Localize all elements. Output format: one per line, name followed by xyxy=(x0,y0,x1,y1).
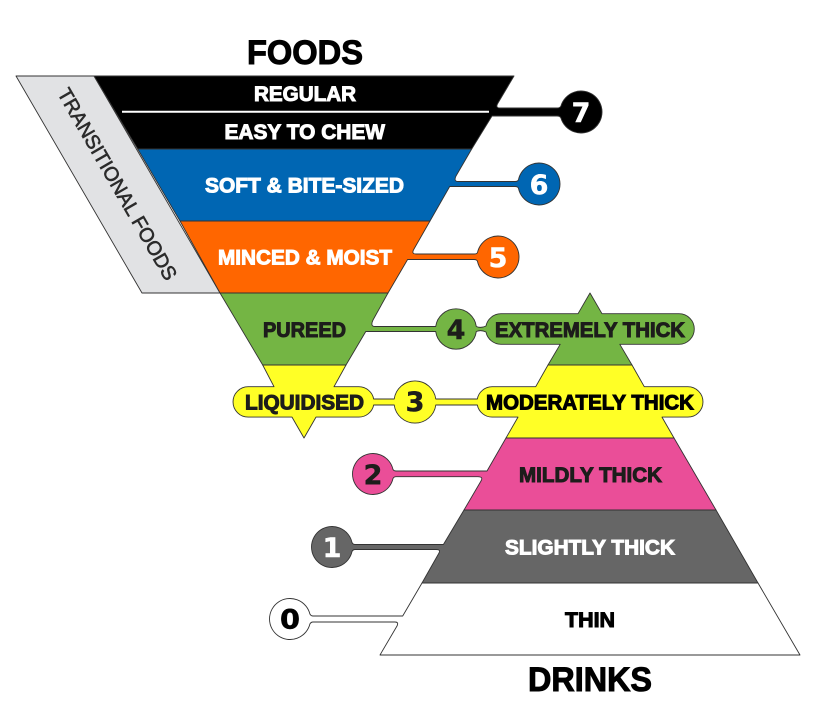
label: pureed: PUREED xyxy=(263,319,346,342)
level 0: thin xyxy=(270,583,800,655)
title: drinks: DRINKS xyxy=(528,661,652,699)
number 7: 7 xyxy=(572,98,590,129)
level 3: liquidised and moderately thick xyxy=(233,365,703,438)
label: easy to chew: EASY TO CHEW xyxy=(224,121,385,144)
number 3: 3 xyxy=(406,387,424,418)
level 5: minced and moist xyxy=(180,221,519,293)
title: foods: FOODS xyxy=(247,34,363,72)
level 2: mildly thick xyxy=(352,438,716,510)
label: slightly thick: SLIGHTLY THICK xyxy=(505,536,675,560)
level 1: slightly thick xyxy=(311,510,758,583)
label: liquidised: LIQUIDISED xyxy=(245,392,364,414)
label: extremely thick: EXTREMELY THICK xyxy=(495,319,685,342)
number 4: 4 xyxy=(447,315,465,346)
number 1: 1 xyxy=(323,533,341,564)
number 2: 2 xyxy=(364,460,382,491)
level 7: regular and easy to chew xyxy=(94,76,602,149)
level 4: pureed and extremely thick xyxy=(220,293,694,365)
label: soft and bite-sized: SOFT & BITE-SIZED xyxy=(205,174,404,198)
number 0: 0 xyxy=(280,604,300,636)
label: minced and moist: MINCED & MOIST xyxy=(218,246,392,270)
label: regular: REGULAR xyxy=(254,83,356,106)
number 6: 6 xyxy=(530,170,548,201)
number 5: 5 xyxy=(489,243,507,274)
level 6: soft and bite-sized xyxy=(138,149,560,221)
label: mildly thick: MILDLY THICK xyxy=(519,464,662,487)
label: moderately thick: MODERATELY THICK xyxy=(486,392,694,414)
panel: transitional foods band xyxy=(16,76,220,293)
label: thin: THIN xyxy=(565,609,615,632)
label: transitional foods: TRANSITIONAL FOODS xyxy=(53,85,181,284)
